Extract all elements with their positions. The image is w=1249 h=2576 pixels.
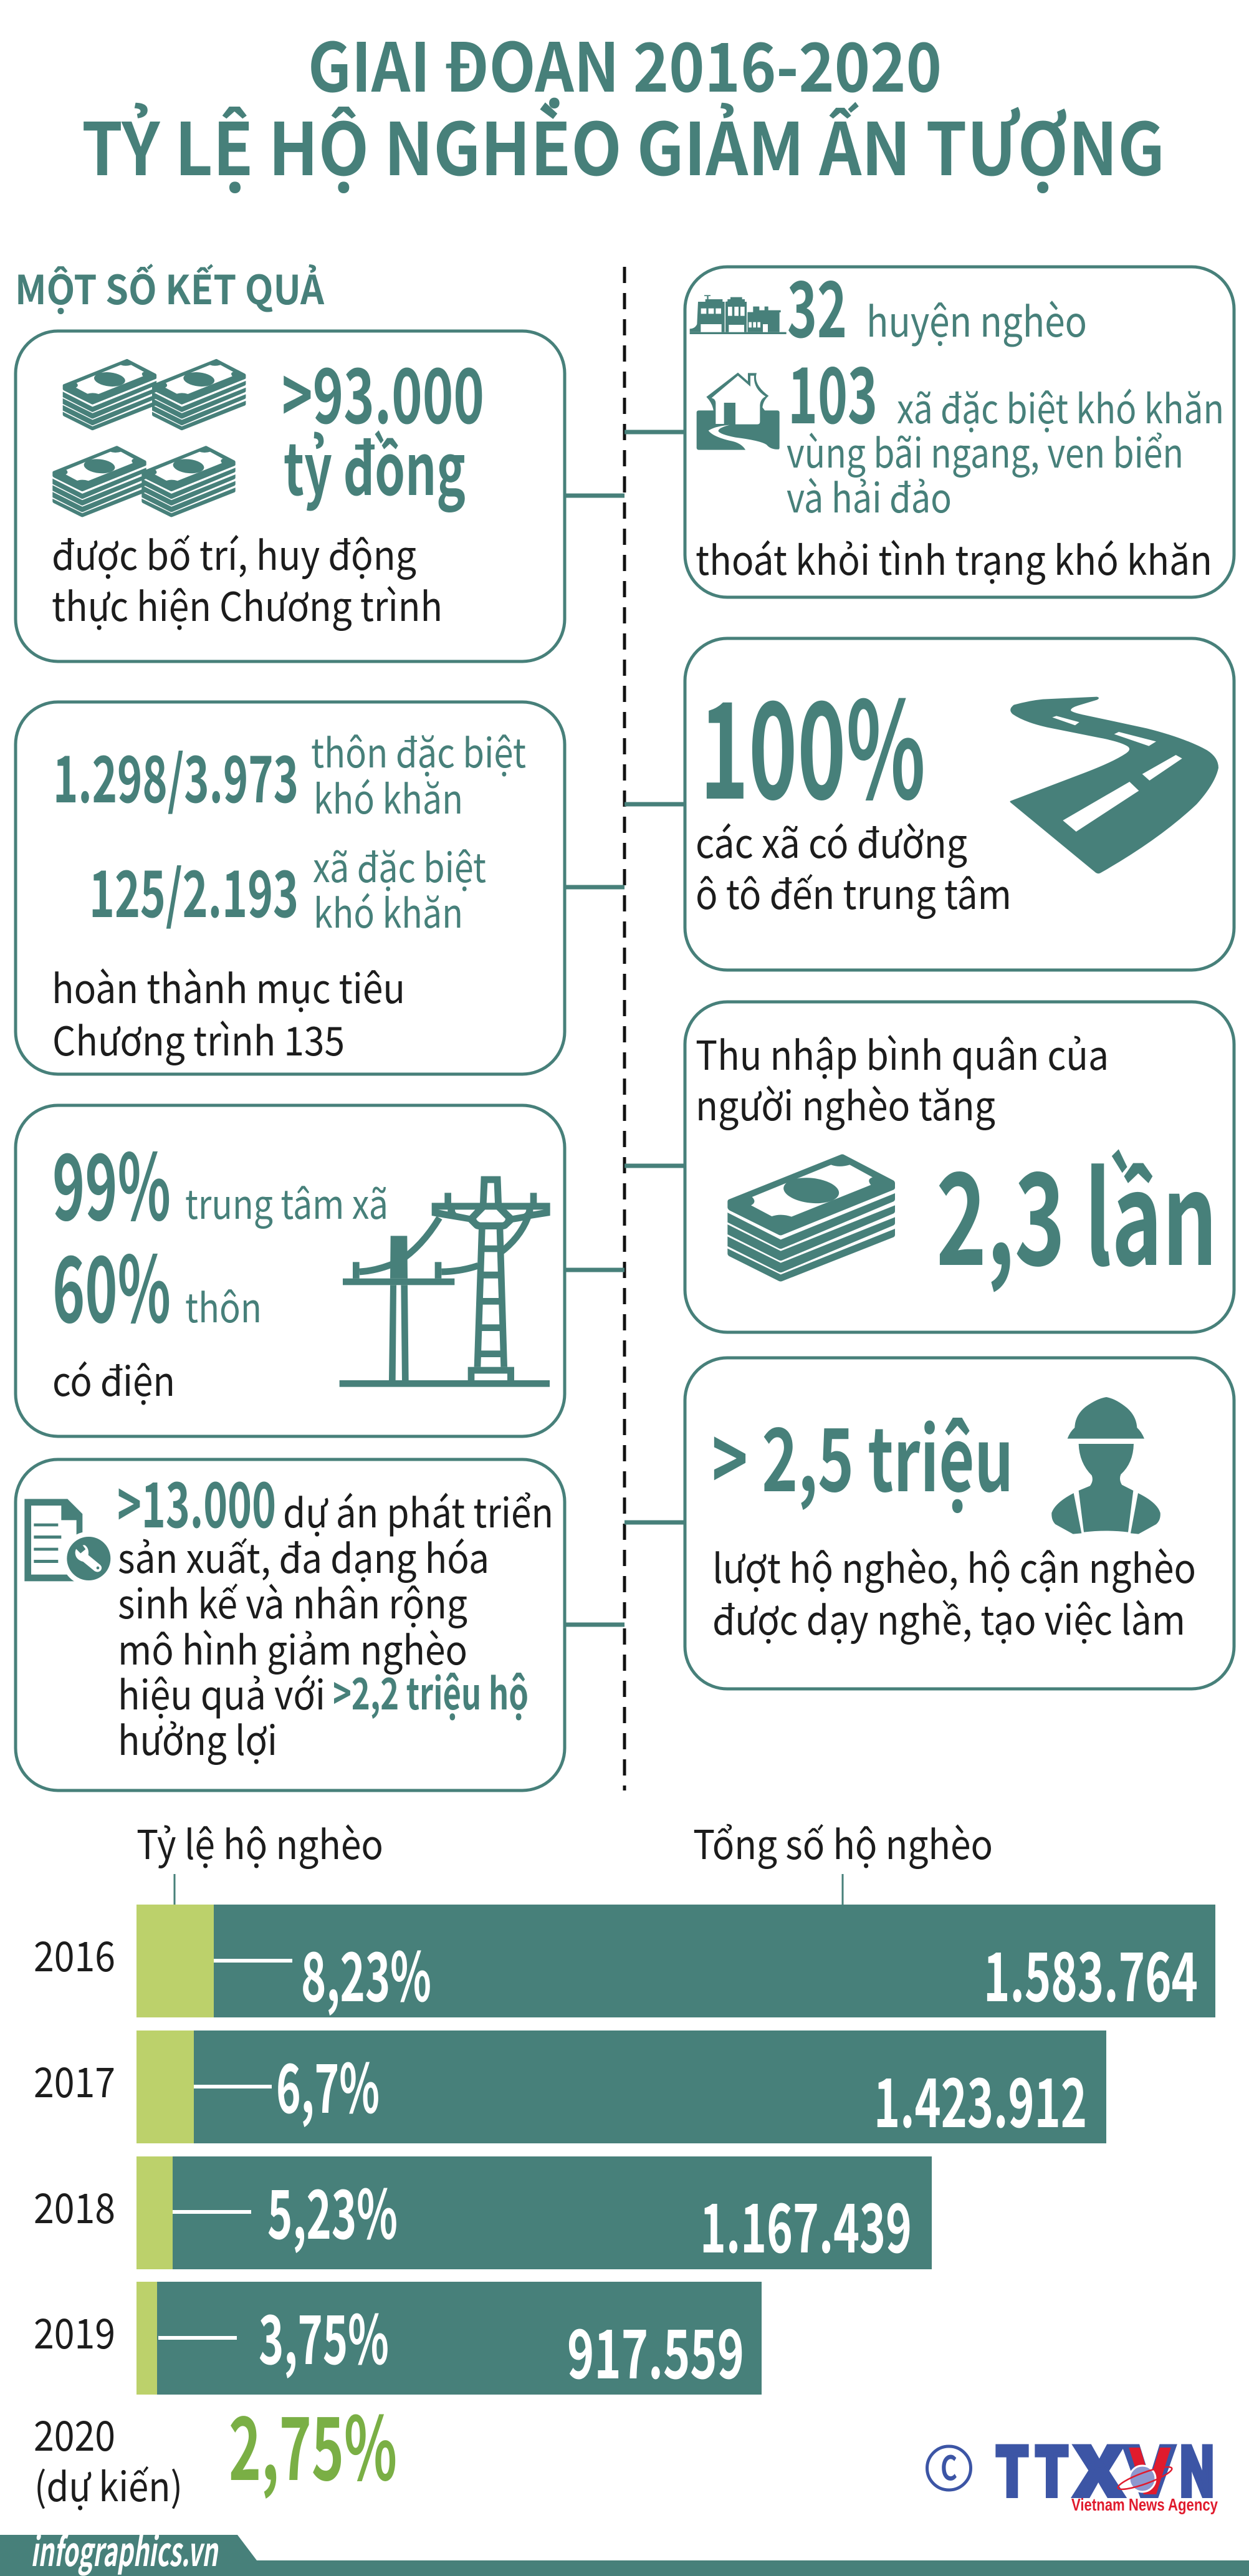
communes label: [313, 837, 486, 940]
panel: funding: [16, 331, 565, 661]
projects text: [117, 1455, 553, 1767]
funding unit: tỷ đồng: [284, 413, 466, 516]
logo: TTXVN: T: [996, 2419, 1028, 2515]
icon: power pylons: [340, 1176, 550, 1387]
row: 2018: [34, 2156, 932, 2272]
communes label: [787, 378, 1224, 524]
logo: TTXVN: [927, 2419, 1218, 2515]
villages label: khó khăn: [313, 768, 463, 825]
roads description: các xã có đường: [696, 812, 967, 870]
row: 2019: 917.559: [567, 2301, 744, 2398]
electricity description: có điện: [52, 1350, 175, 1408]
panel: livelihood projects: [16, 1455, 565, 1790]
communes label: khó khăn: [313, 882, 463, 940]
logo: TTXVN: V: [1129, 2436, 1170, 2509]
funding description: thực hiện Chương trình: [52, 575, 443, 633]
footer band: [0, 2521, 1249, 2576]
panel: vocational training: [685, 1358, 1234, 1689]
panel: income: [685, 1002, 1234, 1332]
logo: TTXVN: T: [1035, 2419, 1068, 2515]
row: 2018: 1.167.439: [700, 2175, 912, 2272]
chart: poverty rate and households: [34, 1814, 1215, 2513]
funding description: [52, 524, 443, 633]
projects text: sản xuất, đa dạng hóa: [118, 1527, 489, 1585]
legend: tổng số hộ nghèo: Tổng số hộ nghèo: [693, 1814, 993, 1871]
training description: lượt hộ nghèo, hộ cận nghèo: [712, 1537, 1196, 1595]
logo: TTXVN: C: [940, 2441, 957, 2490]
districts description: thoát khỏi tình trạng khó khăn: [696, 529, 1212, 587]
income description: người nghèo tăng: [696, 1075, 995, 1132]
communes figure: 103: [788, 334, 878, 446]
panel: electricity: [16, 1105, 565, 1436]
income description: [696, 1024, 1109, 1132]
icon: document and wrench: [24, 1499, 116, 1585]
roads description: ô tô đến trung tâm: [696, 863, 1012, 921]
row: 2017: 6,7%: [276, 2035, 380, 2133]
row: 2017: 2017: [34, 2050, 115, 2110]
projects text: sinh kế và nhân rộng: [118, 1573, 467, 1630]
communes figure: 125/2.193: [89, 843, 299, 936]
icon: money stack: [727, 1154, 895, 1281]
commune label: trung tâm xã: [185, 1173, 388, 1231]
program description: hoàn thành mục tiêu: [52, 958, 405, 1015]
projects text: >13.000: [117, 1455, 276, 1545]
row: 2020 forecast: 2,75%: [229, 2380, 397, 2506]
projects text: >2,2 triệu hộ: [333, 1660, 529, 1723]
program description: [52, 958, 405, 1067]
panel: roads: [685, 638, 1234, 970]
row: 2020 forecast: [34, 2380, 397, 2513]
logo: TTXVN: V: [1125, 2419, 1174, 2515]
projects text: mô hình giảm nghèo: [118, 1619, 467, 1676]
program description: Chương trình 135: [52, 1010, 345, 1067]
title: TỶ LỆ HỘ NGHÈO GIẢM ẤN TƯỢNG: [82, 92, 1165, 196]
row: 2016: 8,23%: [301, 1924, 431, 2021]
projects text: dự án phát triển: [283, 1482, 553, 1539]
row: 2016: [34, 1905, 1215, 2021]
villages label: thôn đặc biệt: [311, 722, 526, 779]
communes label: xã đặc biệt: [313, 837, 486, 894]
icon: road: [1010, 697, 1218, 873]
title: GIAI ĐOẠN 2016-2020: [308, 14, 942, 112]
training description: được dạy nghề, tạo việc làm: [712, 1589, 1185, 1646]
title: [82, 14, 1165, 196]
projects text: hưởng lợi: [118, 1709, 277, 1767]
income description: Thu nhập bình quân của: [696, 1024, 1109, 1082]
projects text: hiệu quả với: [118, 1664, 325, 1721]
village label: thôn: [185, 1277, 262, 1334]
row: 2018: 5,23%: [267, 2161, 398, 2259]
row: 2020 forecast: 2020: [34, 2403, 115, 2463]
training description: [712, 1537, 1196, 1646]
village electricity figure: 60%: [52, 1218, 171, 1349]
icon: money stacks: [52, 359, 246, 517]
panel: poor districts: [685, 248, 1234, 597]
icon: town: [690, 295, 787, 334]
funding description: được bố trí, huy động: [52, 524, 416, 582]
row: 2016: 2016: [34, 1924, 115, 1984]
panel: program 135: [16, 702, 565, 1074]
villages figure: 1.298/3.973: [53, 728, 299, 821]
icon: house and river: [697, 373, 780, 451]
communes label: vùng bãi ngang, ven biển: [787, 422, 1184, 479]
training figure: > 2,5 triệu: [712, 1391, 1013, 1517]
timeline spine: [565, 267, 684, 1790]
row: 2018: 2018: [34, 2176, 115, 2236]
icon: worker: [1051, 1397, 1160, 1534]
districts figure: 32: [787, 248, 847, 360]
communes label: và hải đảo: [787, 467, 952, 524]
row: 2019: [34, 2282, 762, 2398]
row: 2017: 1.423.912: [874, 2050, 1087, 2147]
logo: TTXVN: X: [1074, 2419, 1123, 2515]
roads description: [696, 812, 1012, 921]
row: 2020 forecast: (dự kiến): [34, 2456, 183, 2513]
roads figure: 100%: [700, 644, 926, 837]
districts label: huyện nghèo: [866, 289, 1087, 349]
villages label: [311, 722, 526, 825]
funding amount: >93.000: [282, 335, 484, 446]
logo: TTXVN: N: [1179, 2419, 1215, 2515]
heading: một số kết quả: MỘT SỐ KẾT QUẢ: [15, 259, 325, 316]
row: 2017: [34, 2031, 1106, 2147]
legend: tỷ lệ hộ nghèo: Tỷ lệ hộ nghèo: [136, 1814, 383, 1871]
row: 2019: 3,75%: [259, 2287, 389, 2384]
commune electricity figure: 99%: [52, 1115, 171, 1247]
row: 2019: 2019: [34, 2301, 115, 2361]
